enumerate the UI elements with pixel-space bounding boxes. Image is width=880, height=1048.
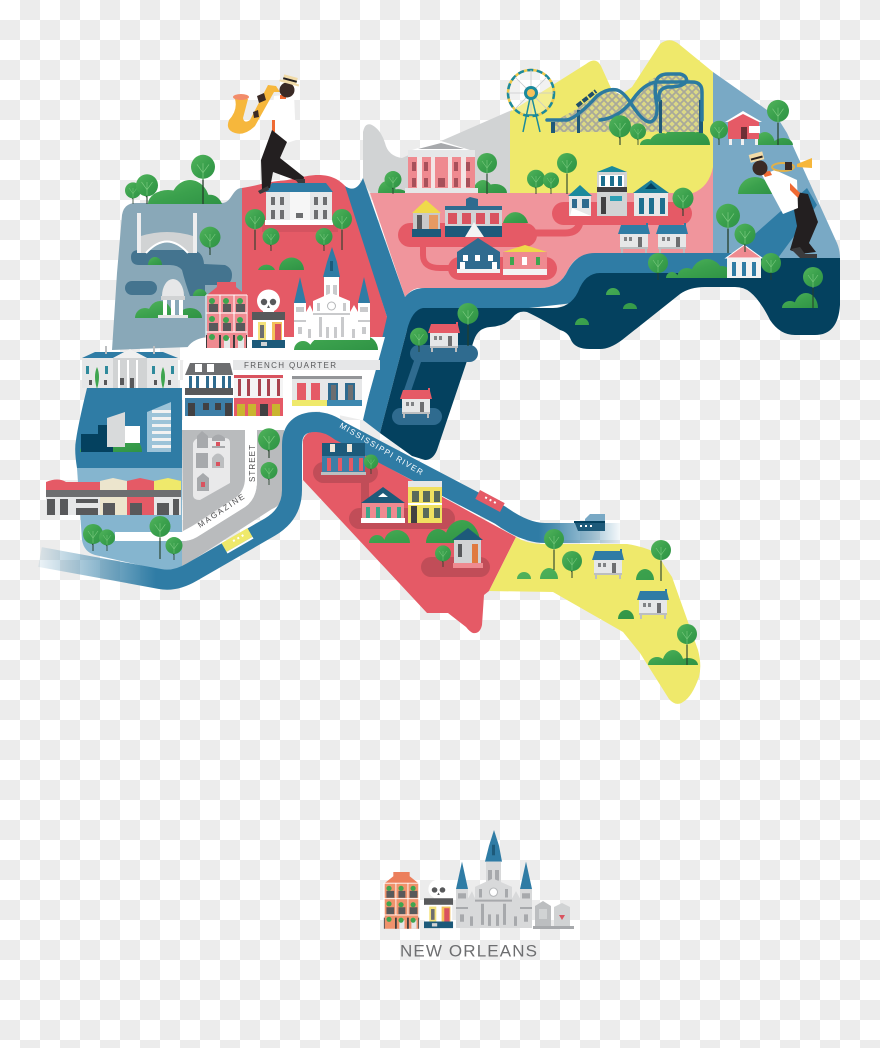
icon: magazine street shop row (46, 478, 181, 515)
icon: tree (672, 188, 694, 216)
icon: tree (166, 537, 182, 560)
lower red district pills (313, 462, 490, 577)
shoes (258, 179, 305, 194)
panel: light blue east district (713, 72, 840, 262)
shirt (272, 94, 296, 143)
icon: tree (83, 524, 103, 551)
saxophone bell rim (233, 94, 249, 100)
icon: pink boat (475, 490, 505, 512)
bush: pond (148, 257, 162, 265)
bushes: cathedral (294, 327, 378, 350)
label: magazine: MAGAZINE (196, 492, 246, 530)
pill: east street (552, 202, 692, 225)
icon: orange balcony house (384, 872, 419, 929)
icon: tree (125, 182, 141, 204)
bushes: east wetlands (782, 293, 818, 308)
river: east diagonal (730, 188, 817, 262)
pill: north (313, 462, 378, 483)
icon: tree (458, 303, 478, 346)
panel: grey block east of street (182, 430, 284, 568)
icon: tree (677, 624, 697, 665)
icon: roller coaster (547, 74, 703, 133)
icon: tree (410, 328, 428, 352)
lake: winding pond (131, 250, 232, 296)
panel: cemetery plot (193, 438, 230, 500)
icon: yellow townhouse (408, 481, 442, 523)
road: white street strip (115, 532, 183, 541)
panel: yellow amusement district (510, 40, 713, 193)
icon: tree (316, 228, 332, 251)
lake: small pill pond (125, 281, 157, 295)
bush: pink district (503, 212, 528, 223)
trousers (261, 130, 304, 190)
icon: tree (258, 428, 280, 458)
shirt (762, 170, 798, 214)
bushes: trumpet player (738, 177, 772, 194)
icon: grey cathedral (456, 830, 532, 928)
path: lower connector (423, 245, 450, 268)
panel: red upper district (200, 175, 388, 342)
trumpet valves (772, 163, 794, 171)
path: upper connector (535, 222, 580, 233)
icon: tree (384, 171, 402, 194)
icon: yellow tram (222, 528, 253, 554)
wetland ponds (392, 345, 478, 425)
title: new orleans: NEW ORLEANS (400, 942, 537, 960)
bushes: lower yellow (517, 568, 654, 619)
icon: tree (651, 540, 671, 581)
icon: teal roof two storey house (597, 166, 627, 216)
bushes: rotunda (135, 301, 202, 318)
bushes: riverfront (666, 259, 732, 278)
icon: wetland house lower (400, 388, 432, 418)
icon: bridge (137, 213, 197, 253)
saxophone (228, 85, 280, 134)
icon: pink creole cottage (361, 487, 405, 523)
icon: red stilt house (725, 111, 762, 145)
icon: river ship (574, 514, 605, 531)
icon: balcony house (206, 282, 247, 348)
panel: white french quarter (183, 337, 385, 432)
icon: navy roof arched house (633, 180, 669, 216)
icon: tree (200, 227, 220, 255)
icon: cottage (618, 223, 650, 253)
icon: tree (136, 174, 158, 204)
icon: tree (767, 100, 789, 145)
bushes (80, 126, 818, 665)
panel: grey north district (363, 110, 512, 195)
head (752, 160, 768, 176)
icon: cottage lower east (637, 589, 669, 619)
icon: yellow roof pink house (503, 245, 547, 275)
collar and tie (272, 95, 286, 132)
icon: tree (609, 115, 631, 145)
pill: middle (349, 508, 455, 529)
icon: tree (477, 153, 497, 194)
pond: upper (410, 345, 478, 362)
panel: navy wetlands (380, 258, 840, 460)
icon: ferris wheel (508, 70, 554, 132)
bottom logo skyline (384, 830, 574, 929)
french quarter banner strip (233, 360, 380, 370)
icon: tree (557, 153, 577, 194)
hand (785, 162, 792, 170)
panel: pink district (370, 160, 713, 297)
icon: tree (716, 204, 740, 253)
icon: tree (562, 551, 582, 578)
icon: wetland house (428, 322, 460, 352)
bushes: red house (755, 132, 793, 145)
panel: red lower district (303, 432, 516, 633)
tie (762, 171, 800, 198)
icon: skull building (424, 880, 453, 928)
panel: blue downtown (75, 388, 182, 468)
icon: tree (710, 121, 728, 145)
pond: lower (392, 408, 442, 425)
pink district pills and paths (398, 202, 692, 280)
pill: south street (448, 257, 557, 280)
icon: rotunda (158, 279, 188, 318)
icon: cottage (656, 223, 688, 253)
icon: tree (544, 529, 564, 570)
trousers (790, 192, 818, 254)
panel: grey block west of street (182, 430, 245, 532)
bushes: roller coaster (640, 126, 710, 145)
river: mississippi (40, 422, 620, 580)
lake in park (125, 250, 232, 296)
bushes: northwest (148, 180, 222, 204)
icon: tree (364, 455, 378, 474)
icon: tree (803, 267, 823, 308)
icon: french quarter red house (234, 375, 283, 416)
icon: teal roof house small (568, 185, 592, 216)
icon: tree (734, 224, 756, 252)
bushes: lower red (369, 520, 480, 543)
hat (749, 151, 764, 163)
bushes: grey district (378, 181, 408, 193)
icon: riverside mansion (82, 346, 178, 389)
label: street: STREET (248, 445, 257, 482)
bushes: downtown (80, 437, 142, 452)
pill: west street (398, 223, 537, 247)
icon: large blue roof house (445, 197, 502, 237)
icon: navy roof grey house (452, 528, 483, 568)
icon: tree (527, 170, 545, 194)
icon: tree (435, 545, 451, 567)
icon: cathedral (294, 247, 370, 340)
icon: navy roof red house (321, 443, 366, 475)
label: mississippi river: MISSISSIPPI RIVER (338, 421, 425, 477)
icon: pink columned hall (405, 141, 478, 193)
panel: light blue uptown (77, 468, 182, 572)
icon: riverside white house (726, 245, 762, 278)
icon: tree (761, 253, 781, 280)
panel: grey-blue park district (112, 188, 242, 350)
icon: blue cottage (457, 238, 500, 273)
icon: tree (260, 462, 278, 485)
icon: saxophone player (228, 74, 305, 194)
road: magazine street (183, 430, 257, 541)
icon: cottage lower (592, 549, 624, 579)
bushes: wetlands (575, 288, 637, 325)
icon: tree (543, 172, 559, 194)
icon: yellow roof cottage (412, 200, 441, 237)
icon: tree (99, 529, 115, 551)
trumpet (797, 158, 812, 168)
hat (279, 74, 301, 86)
icon: tombs (533, 901, 574, 929)
icon: skull building (252, 290, 285, 348)
base map regions (40, 40, 840, 704)
panel: yellow lower district (489, 537, 700, 704)
bush: pond shore (193, 289, 207, 296)
path: pond stem (407, 360, 418, 392)
icon: tree (262, 228, 280, 251)
head (280, 82, 294, 98)
icon: tree (630, 123, 646, 145)
icon: cemetery tombs (196, 431, 225, 491)
label: french quarter: FRENCH QUARTER (244, 361, 336, 370)
icon: french quarter townhouse (185, 363, 233, 416)
icon: tree (245, 209, 265, 250)
arm hands (253, 93, 266, 118)
icon: tree (191, 155, 215, 204)
icon: museum (262, 183, 338, 232)
icon: french quarter arched houses (292, 376, 362, 406)
pill: south (421, 557, 490, 577)
bushes: red park (258, 258, 304, 270)
icon: tree (332, 209, 352, 250)
shoes (791, 247, 817, 258)
icon: trumpet player (749, 151, 818, 258)
icon: downtown skyline (81, 402, 171, 452)
trees (83, 100, 823, 665)
bushes: pink building (473, 180, 507, 193)
bushes: southeast (648, 650, 698, 665)
river: north channel and east branch (345, 178, 760, 433)
path: connector (361, 480, 369, 510)
icon: tree (150, 516, 170, 559)
icon: tree (648, 253, 668, 280)
